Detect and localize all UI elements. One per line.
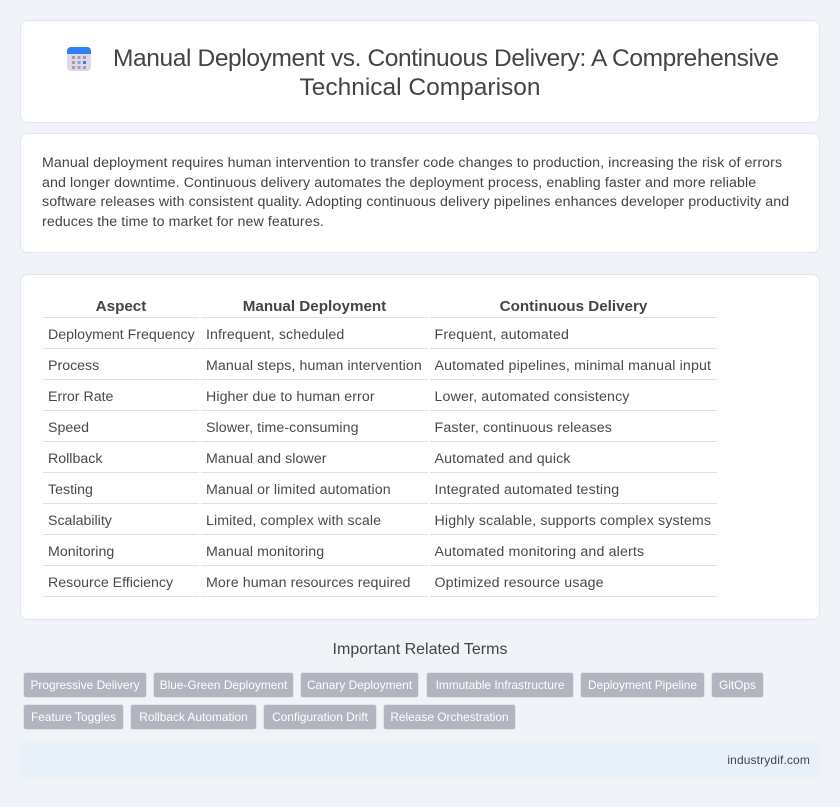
comparison table: Manual steps, human intervention: [206, 358, 422, 374]
comparison table: Scalability: [48, 512, 112, 528]
comparison table: Automated monitoring and alerts: [434, 544, 644, 560]
comparison table: Automated pipelines, minimal manual input: [434, 358, 711, 374]
panel: title header: [20, 20, 820, 123]
related terms tags: Configuration Drift: [272, 710, 368, 724]
comparison table: Frequent, automated: [434, 326, 569, 342]
related terms tags: Immutable Infrastructure: [436, 678, 564, 692]
comparison table: [43, 298, 717, 597]
intro paragraph: reduces the time to market for new features.: [42, 214, 324, 230]
comparison table: Error Rate: [48, 388, 113, 404]
related terms tags: Rollback Automation: [139, 710, 248, 724]
comparison table: Testing: [48, 482, 93, 498]
intro paragraph: and longer downtime. Continuous delivery automates the deployment process, enabling faster and more reliable: [42, 174, 756, 190]
comparison table: Manual or limited automation: [206, 482, 391, 498]
comparison table: Manual monitoring: [206, 544, 324, 560]
comparison table: More human resources required: [206, 574, 410, 590]
icon: calendar: [67, 47, 91, 71]
related terms tags: Release Orchestration: [390, 710, 509, 724]
title: [113, 45, 779, 101]
comparison table: Rollback: [48, 450, 102, 466]
table header: [96, 298, 648, 315]
comparison table: Process: [48, 358, 99, 374]
footer bar: [20, 743, 820, 777]
comparison table: Lower, automated consistency: [434, 388, 630, 404]
comparison table: Highly scalable, supports complex systems: [434, 512, 711, 528]
related terms tags: [23, 672, 764, 730]
panel: comparison table: [20, 274, 820, 620]
comparison table: Speed: [48, 420, 89, 436]
comparison table: Manual and slower: [206, 450, 327, 466]
related terms tags: Blue-Green Deployment: [160, 678, 287, 692]
intro paragraph: [42, 155, 789, 230]
comparison table: Deployment Frequency: [48, 326, 195, 342]
comparison table: Automated and quick: [434, 450, 571, 466]
comparison table: Infrequent, scheduled: [206, 326, 344, 342]
comparison table: Resource Efficiency: [48, 574, 173, 590]
title: Technical Comparison: [299, 74, 541, 101]
footer source: industrydif.com: [727, 753, 810, 767]
comparison table: Integrated automated testing: [434, 482, 619, 498]
related terms tags: Progressive Delivery: [30, 678, 140, 692]
comparison table: Optimized resource usage: [434, 574, 604, 590]
table header: Aspect: [96, 298, 146, 315]
related terms tags: Feature Toggles: [31, 710, 116, 724]
related terms tags: Canary Deployment: [307, 678, 412, 692]
related terms heading: Important Related Terms: [333, 641, 507, 658]
table header: Continuous Delivery: [500, 298, 647, 315]
intro paragraph: software releases with consistent quality. Adopting continuous delivery pipelines enhances developer productivity and: [42, 194, 789, 210]
related terms tags: Deployment Pipeline: [588, 678, 697, 692]
panel: intro: [20, 133, 820, 253]
comparison table: Higher due to human error: [206, 388, 375, 404]
intro paragraph: Manual deployment requires human intervention to transfer code changes to production, increasing the risk of errors: [42, 155, 782, 171]
comparison table: Faster, continuous releases: [434, 420, 612, 436]
comparison table: Slower, time-consuming: [206, 420, 359, 436]
comparison table: Limited, complex with scale: [206, 512, 381, 528]
comparison table: Monitoring: [48, 544, 114, 560]
related terms tags: GitOps: [719, 678, 756, 692]
table header: Manual Deployment: [243, 298, 386, 315]
title: Manual Deployment vs. Continuous Delivery: A Comprehensive: [113, 45, 779, 72]
